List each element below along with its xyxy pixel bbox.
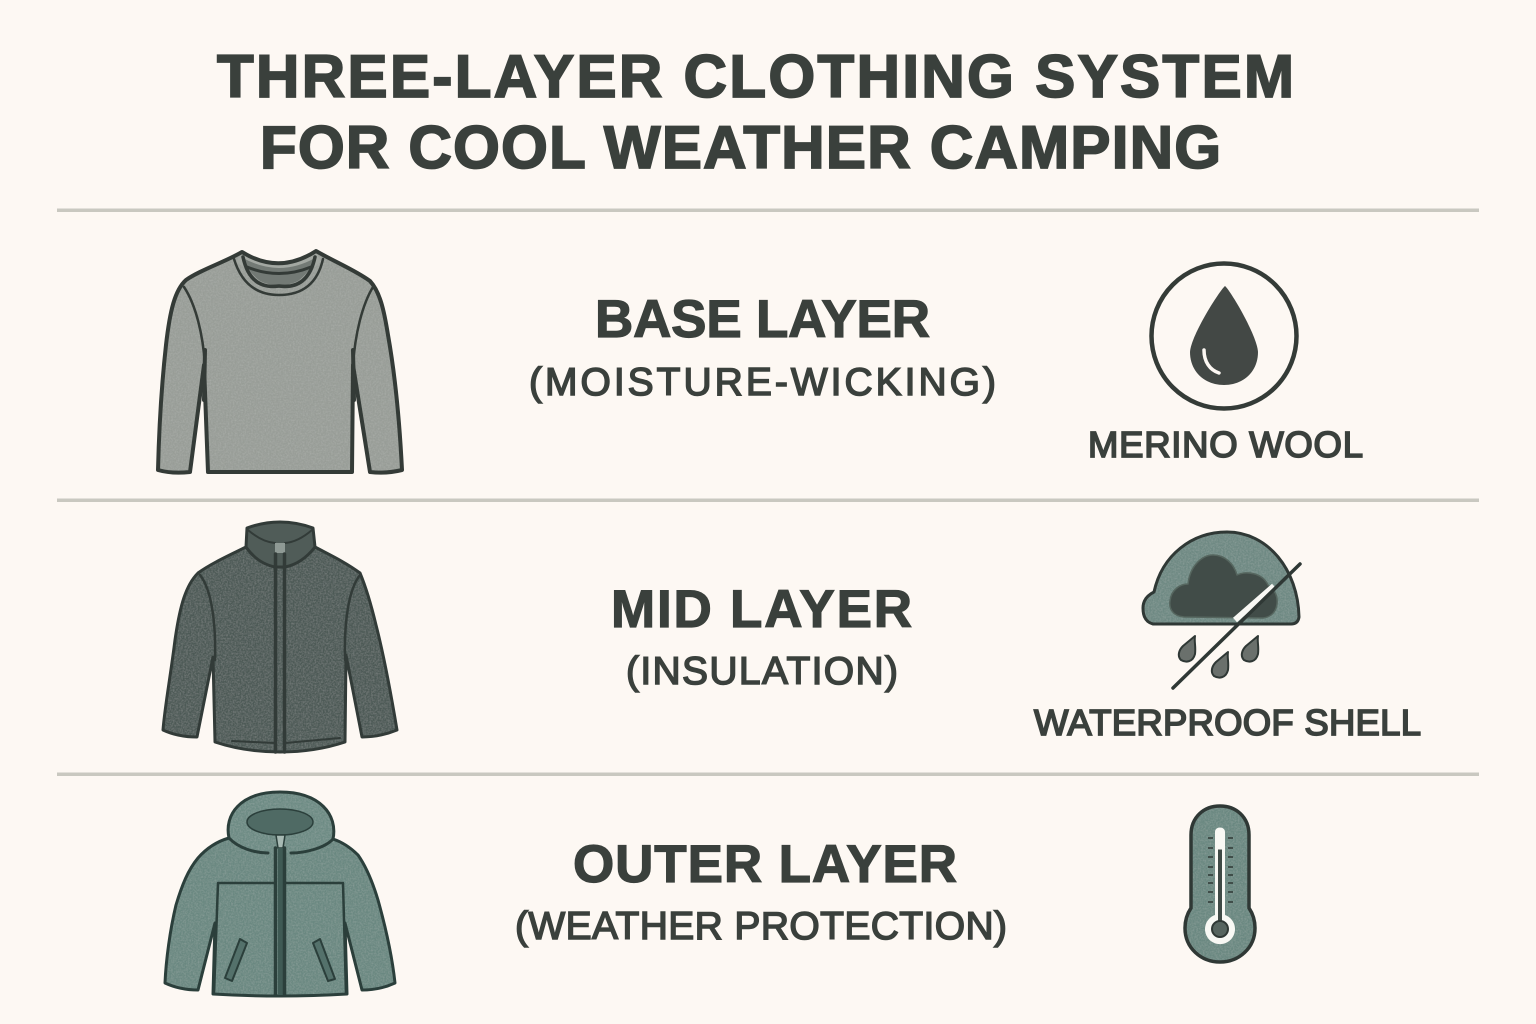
- panel: base layer: [158, 251, 1363, 473]
- heading: mid layer: MID LAYER: [611, 580, 912, 639]
- text: moisture-wicking: (MOISTURE-WICKING): [529, 361, 996, 404]
- icon: thermometer: [1185, 806, 1255, 962]
- title: THREE-LAYER CLOTHING SYSTEM: [217, 43, 1294, 110]
- text: insulation: (INSULATION): [626, 650, 898, 693]
- icon: teal hooded outer jacket: [165, 792, 395, 996]
- label: merino wool: MERINO WOOL: [1088, 424, 1363, 465]
- panel: outer layer: [165, 792, 1255, 996]
- title: FOR COOL WEATHER CAMPING: [260, 114, 1221, 181]
- title: [217, 43, 1294, 181]
- panel: mid layer: [163, 522, 1421, 752]
- icon: waterproof rain cloud with slash: [1143, 532, 1300, 688]
- heading: base layer: BASE LAYER: [595, 290, 930, 349]
- text: weather protection: (WEATHER PROTECTION): [515, 905, 1007, 948]
- icon: grey long-sleeve base layer shirt: [158, 251, 402, 473]
- icon: water drop in circle: [1152, 264, 1296, 408]
- icon: dark fleece mid layer jacket: [163, 522, 397, 752]
- heading: outer layer: OUTER LAYER: [573, 835, 957, 894]
- label: waterproof shell: WATERPROOF SHELL: [1034, 702, 1421, 743]
